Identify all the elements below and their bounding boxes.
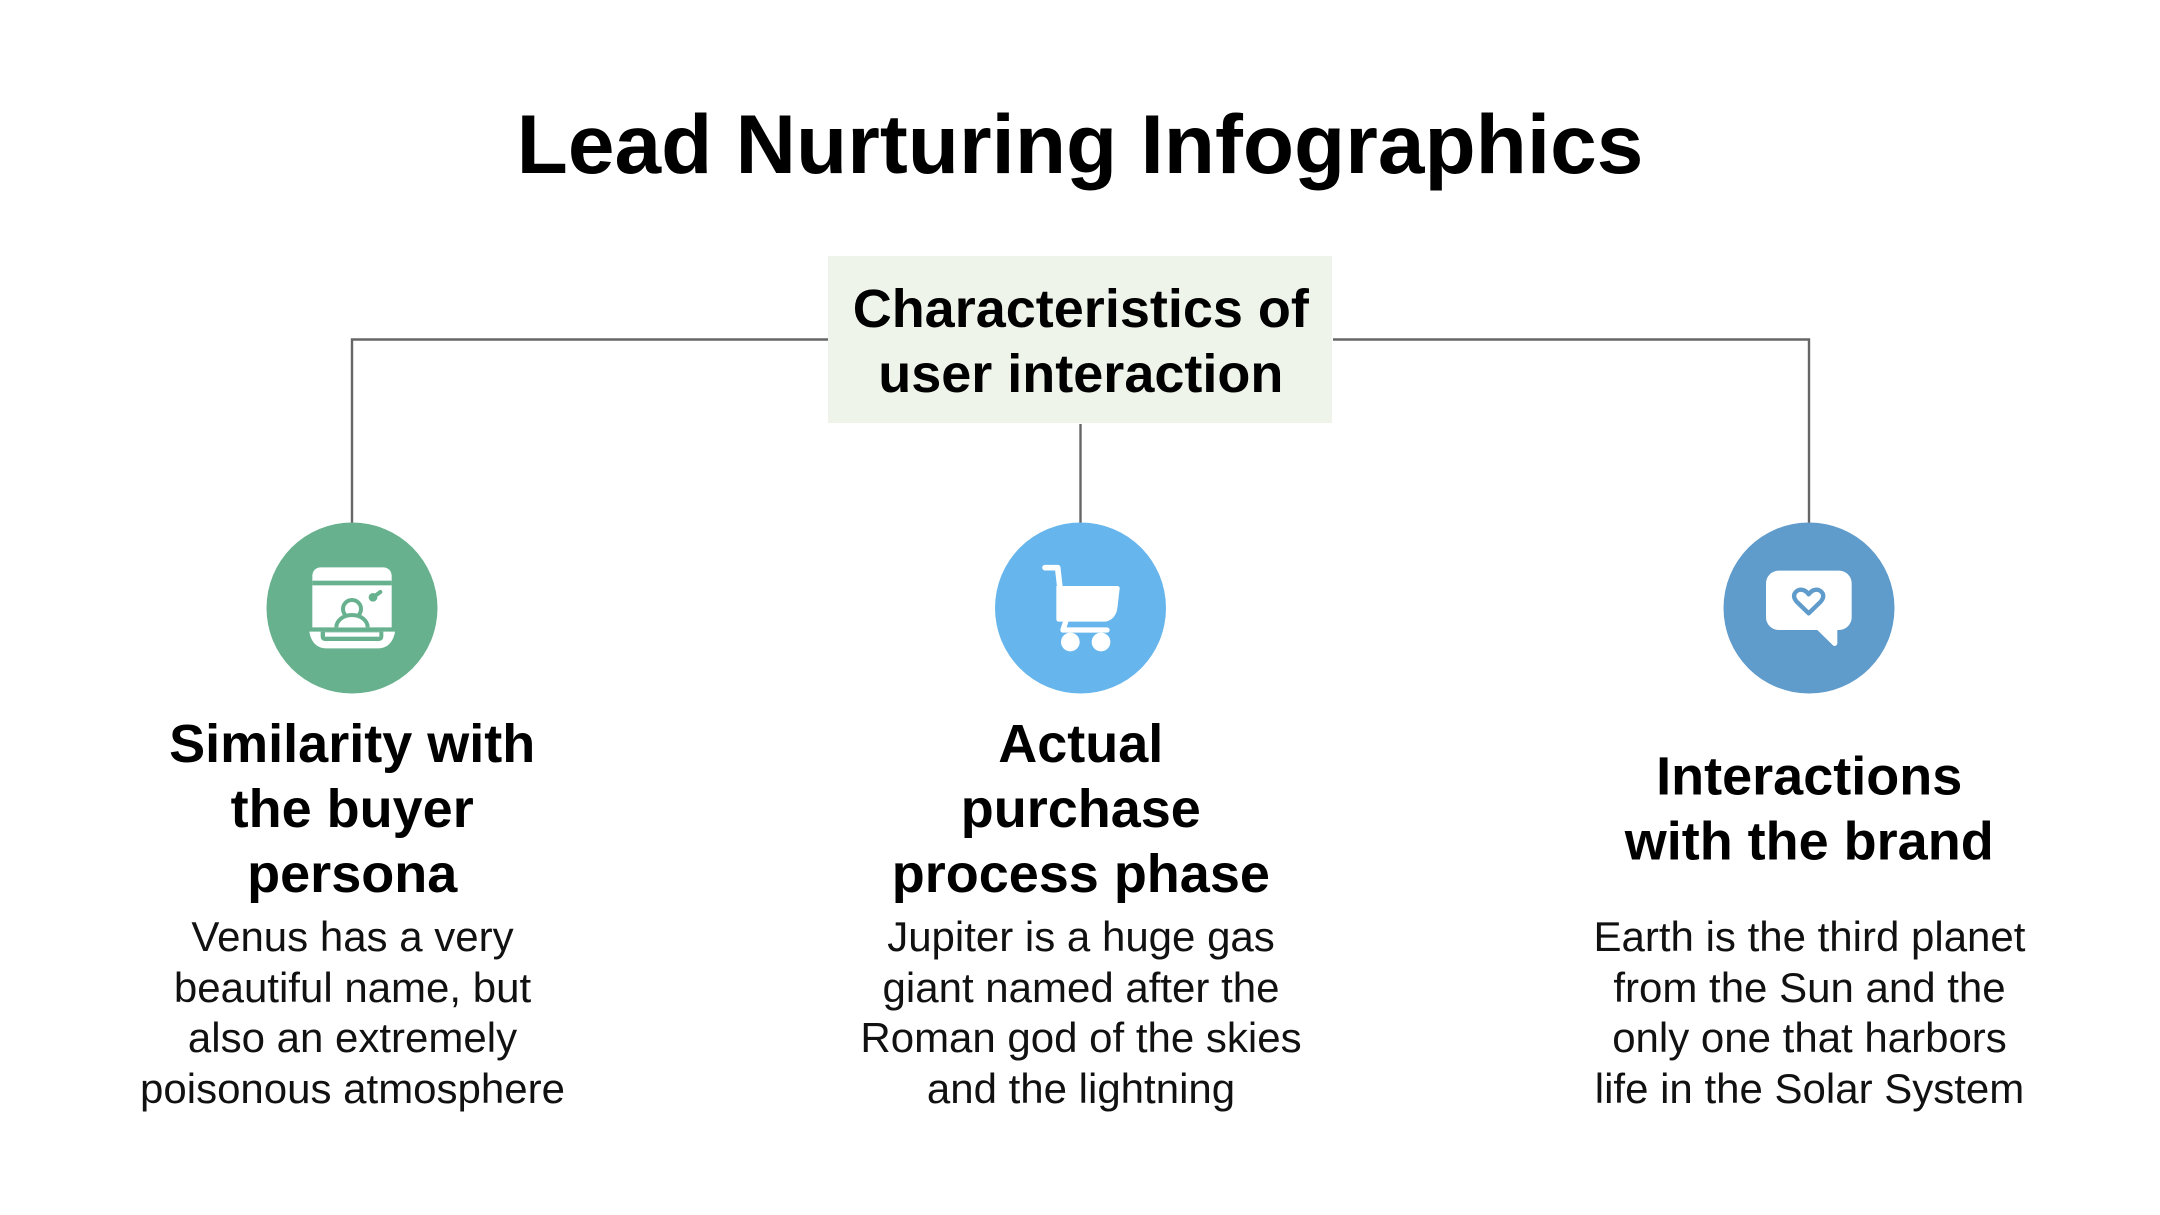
connector lines <box>352 340 1809 523</box>
text block <box>1594 913 2026 1112</box>
text block <box>140 913 565 1112</box>
text block: Venus has a very <box>191 913 514 960</box>
heading <box>1624 746 1994 872</box>
text block: poisonous atmosphere <box>140 1065 565 1112</box>
text block: giant named after the <box>883 964 1279 1011</box>
text block: Jupiter is a huge gas <box>887 913 1275 960</box>
heading: persona <box>247 844 458 904</box>
text block: from the Sun and the <box>1613 964 2006 1011</box>
heading <box>169 714 535 904</box>
central box: characteristics of user interaction <box>828 256 1332 423</box>
text block: Earth is the third planet <box>1594 913 2026 960</box>
text block <box>860 913 1302 1112</box>
heading: Similarity with <box>169 714 535 774</box>
heading: process phase <box>892 844 1270 904</box>
panel: interactions with the brand <box>1594 522 2026 1112</box>
panel: similarity with the buyer persona <box>140 522 565 1112</box>
panel: actual purchase process phase <box>860 522 1302 1112</box>
text block: only one that harbors <box>1612 1014 2007 1061</box>
text block: and the lightning <box>927 1065 1235 1112</box>
icon: speech bubble with heart <box>1724 522 1894 694</box>
heading: with the brand <box>1624 812 1994 872</box>
heading <box>892 714 1270 904</box>
heading: Interactions <box>1656 746 1962 806</box>
central box: characteristics of user interaction: user interaction <box>878 344 1283 404</box>
text block: beautiful name, but <box>174 964 531 1011</box>
central box: characteristics of user interaction: Characteristics of <box>853 279 1310 339</box>
text block: Roman god of the skies <box>860 1014 1302 1061</box>
text block: also an extremely <box>188 1014 517 1061</box>
icon: persona on laptop <box>266 522 438 694</box>
heading: purchase <box>961 779 1201 839</box>
heading: Actual <box>998 714 1163 774</box>
icon: shopping cart <box>995 522 1166 694</box>
text block: life in the Solar System <box>1595 1065 2024 1112</box>
heading: the buyer <box>231 779 474 839</box>
title: Lead Nurturing Infographics <box>517 97 1643 191</box>
